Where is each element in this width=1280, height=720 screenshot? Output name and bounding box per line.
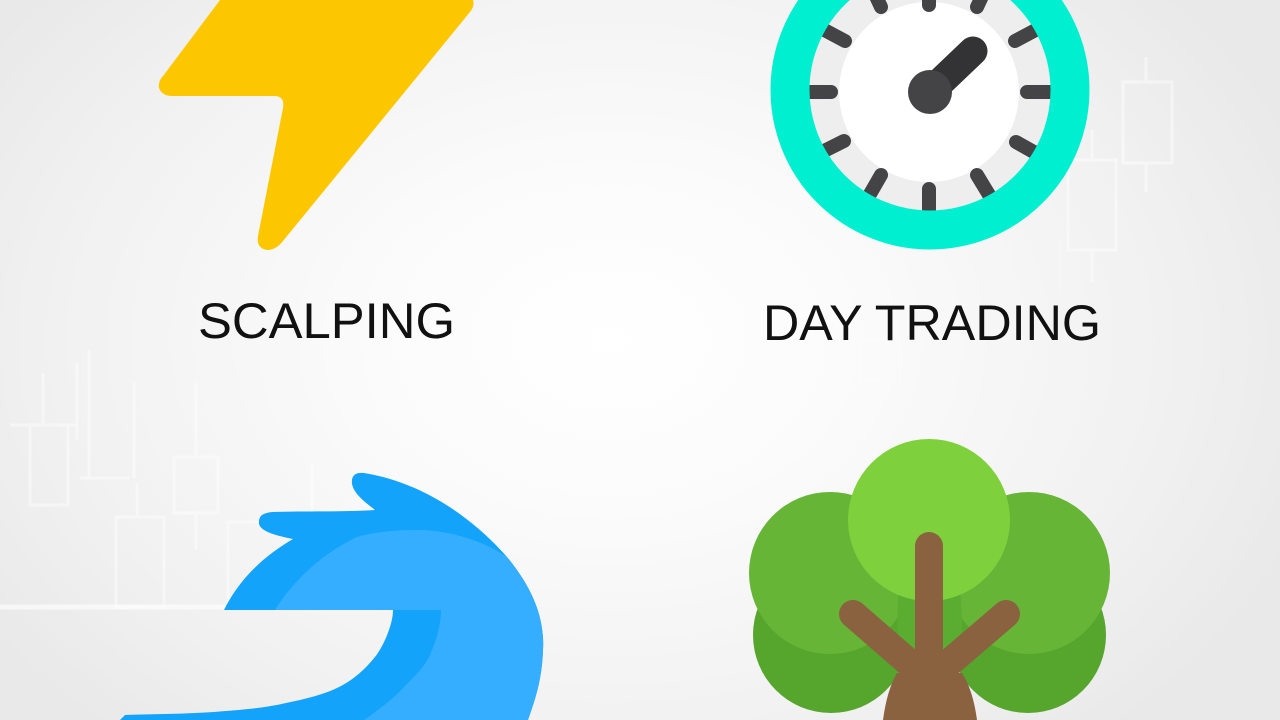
dial hand (930, 51, 973, 92)
top foliage (848, 439, 1010, 601)
candlestick pattern: left (10, 350, 312, 607)
icon: tree (749, 439, 1110, 720)
lower foliage (753, 557, 909, 713)
baseline stripe (0, 604, 226, 610)
icon: lightning bolt (159, 0, 474, 250)
trunk and branches (853, 546, 1006, 720)
icon: wave (120, 473, 543, 720)
dial ticks (800, 0, 1060, 225)
dial face (839, 2, 1019, 182)
icon: stopwatch dial (790, 0, 1070, 230)
candlestick pattern: right (860, 57, 1172, 380)
wave light crest (275, 530, 543, 720)
centre shade (898, 580, 962, 660)
wave dark body (120, 473, 543, 720)
label: day trading: DAY TRADING (763, 295, 1101, 351)
dial hub (908, 70, 952, 114)
dial backing (808, 0, 1052, 212)
label: scalping: SCALPING (198, 293, 455, 349)
dial ring (790, 0, 1070, 230)
middle foliage (749, 492, 911, 654)
